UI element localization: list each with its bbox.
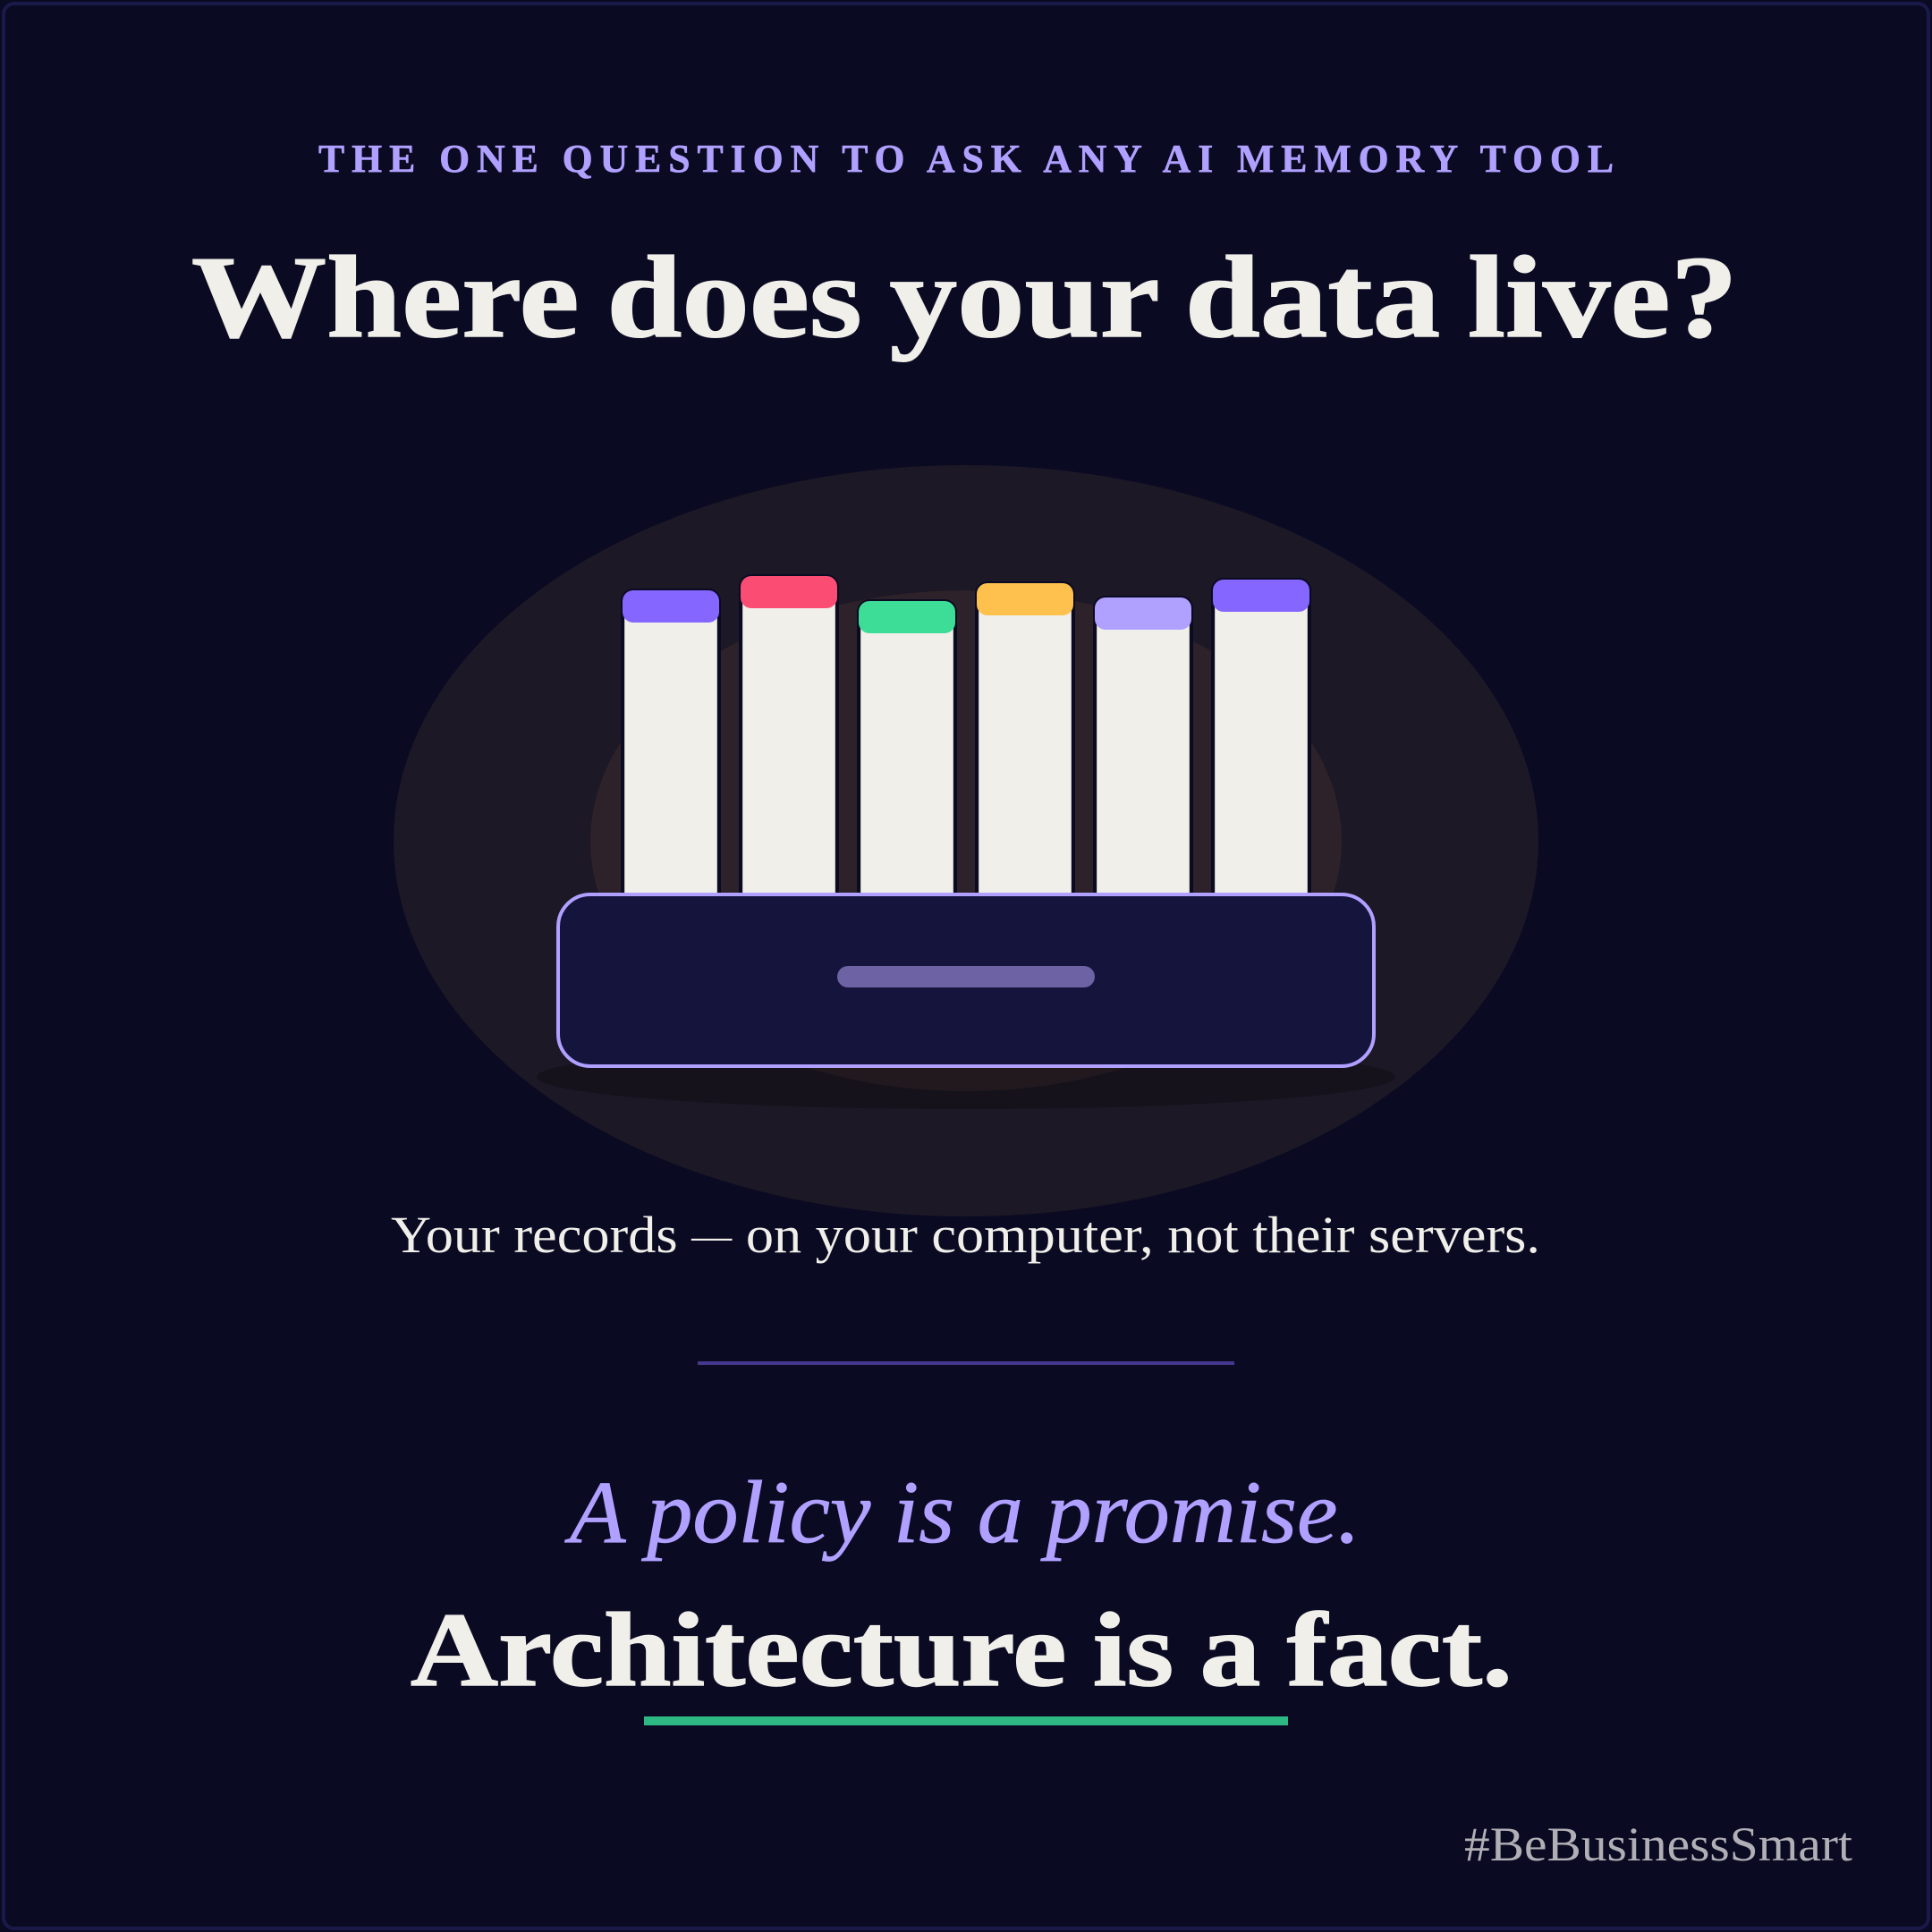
green underline bbox=[644, 1716, 1288, 1725]
closing line: architecture: Architecture is a fact. bbox=[411, 1591, 1513, 1708]
caption: — bbox=[691, 1216, 733, 1258]
computer base bbox=[558, 894, 1374, 1066]
record card 6 with purple tab bbox=[1211, 578, 1311, 903]
closing line: policy: A policy is a promise. bbox=[564, 1462, 1360, 1562]
divider bbox=[698, 1361, 1234, 1365]
ground shadow bbox=[537, 1045, 1395, 1109]
title: Where does your data live? bbox=[191, 233, 1738, 362]
outer glow ellipse bbox=[394, 465, 1538, 1216]
eyebrow heading: THE ONE QUESTION TO ASK ANY AI MEMORY TOOL bbox=[318, 137, 1621, 181]
record card 2 with pink tab bbox=[739, 574, 839, 903]
record card 3 with green tab bbox=[857, 599, 957, 903]
record card 5 with lavender tab bbox=[1093, 596, 1193, 903]
inner glow ellipse bbox=[590, 590, 1342, 1091]
illustration: local records in a computer bbox=[394, 465, 1538, 1216]
hashtag: #BeBusinessSmart bbox=[1464, 1818, 1852, 1871]
record card 4 with amber tab bbox=[975, 581, 1075, 903]
caption: on your computer, not their servers. bbox=[732, 1206, 1540, 1264]
record card 1 with purple tab bbox=[621, 589, 721, 903]
drive slot bbox=[837, 966, 1095, 987]
caption: Your records bbox=[391, 1206, 658, 1264]
